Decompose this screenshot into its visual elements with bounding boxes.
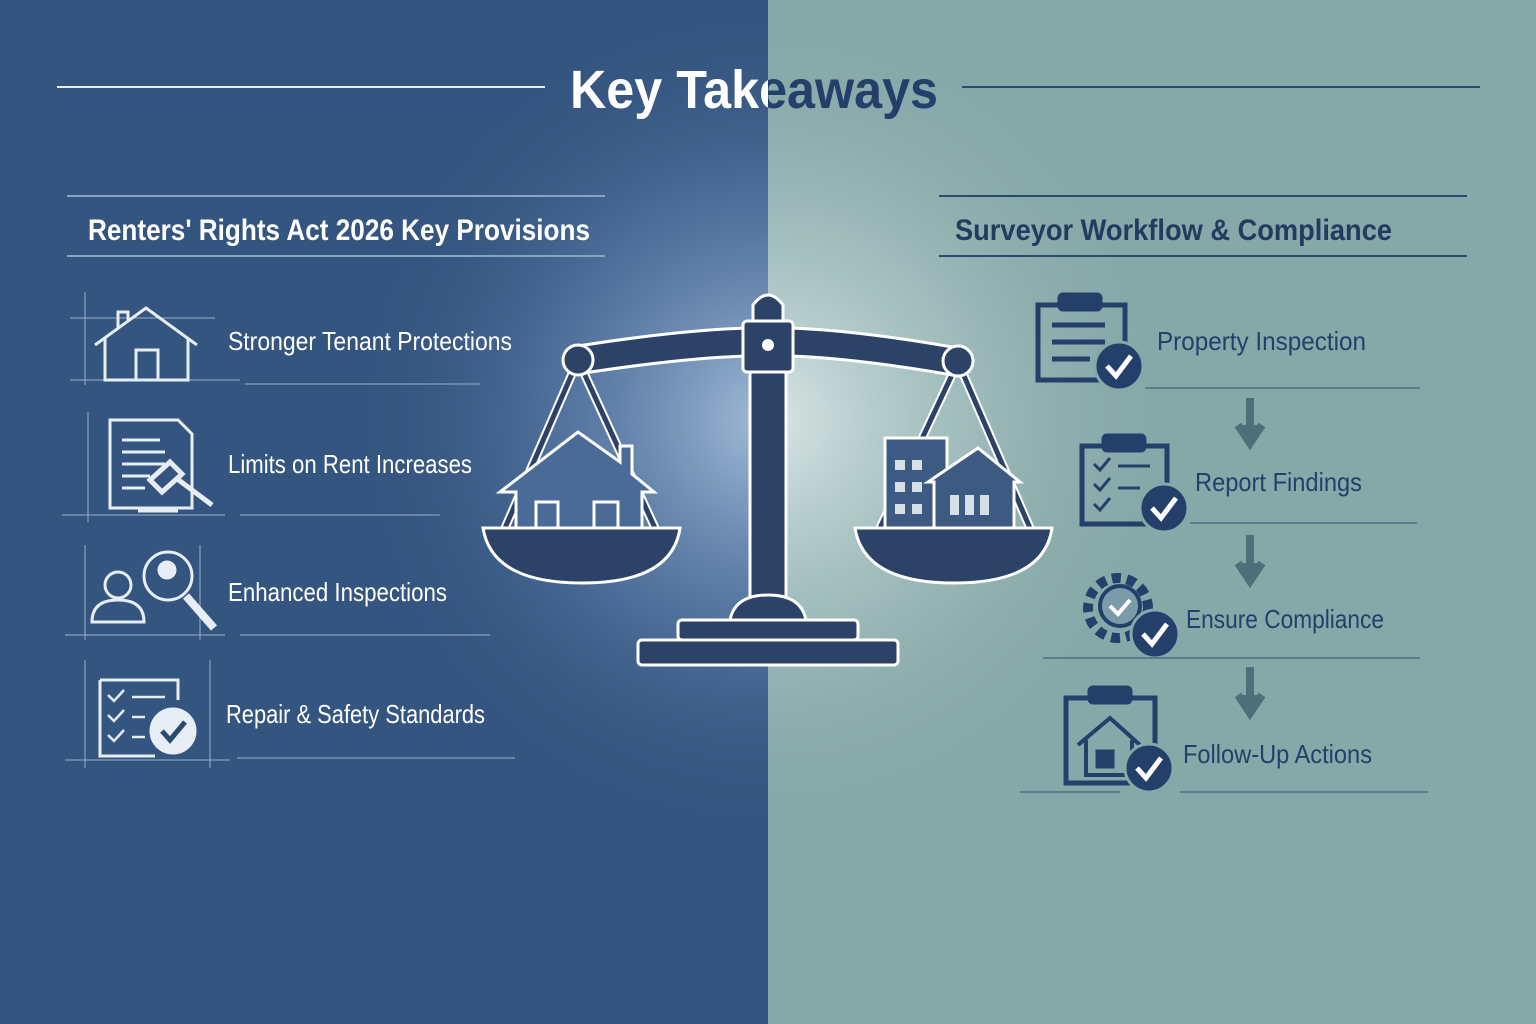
left house	[500, 432, 654, 528]
item: enhanced inspections: Enhanced Inspections	[228, 577, 447, 607]
step: report findings	[1082, 436, 1417, 532]
step: follow-up actions	[1020, 688, 1428, 792]
item: limits on rent increases: Limits on Rent Increases	[228, 449, 472, 479]
arrow 1	[1238, 398, 1262, 443]
arrow 2	[1238, 535, 1262, 581]
beam and post	[578, 328, 748, 374]
panel: left provisions	[62, 292, 515, 768]
heading: left panel: Renters' Rights Act 2026 Key Provisions	[88, 214, 590, 247]
panel: right workflow	[1020, 295, 1428, 792]
item: limits on rent increases	[62, 412, 472, 522]
step: property inspection	[1038, 295, 1420, 390]
item: enhanced inspections	[65, 545, 490, 640]
step: property inspection: Property Inspection	[1157, 326, 1366, 356]
scale	[483, 295, 1052, 665]
step: ensure compliance: Ensure Compliance	[1186, 604, 1384, 634]
item: stronger tenant protections: Stronger Tenant Protections	[228, 326, 512, 356]
arrow 3	[1238, 667, 1262, 713]
heading: right panel: Surveyor Workflow & Compliance	[955, 214, 1392, 247]
item: repair and safety standards	[65, 660, 515, 768]
pans	[483, 528, 680, 583]
item: repair and safety standards: Repair & Safety Standards	[226, 699, 485, 729]
right buildings	[885, 438, 1020, 528]
step: follow-up actions: Follow-Up Actions	[1183, 739, 1372, 769]
title: Key Takeaways	[570, 60, 938, 120]
scale strings	[505, 360, 1030, 528]
step: ensure compliance	[1043, 578, 1420, 658]
step: report findings: Report Findings	[1195, 467, 1362, 497]
item: stronger tenant protections	[70, 292, 512, 385]
